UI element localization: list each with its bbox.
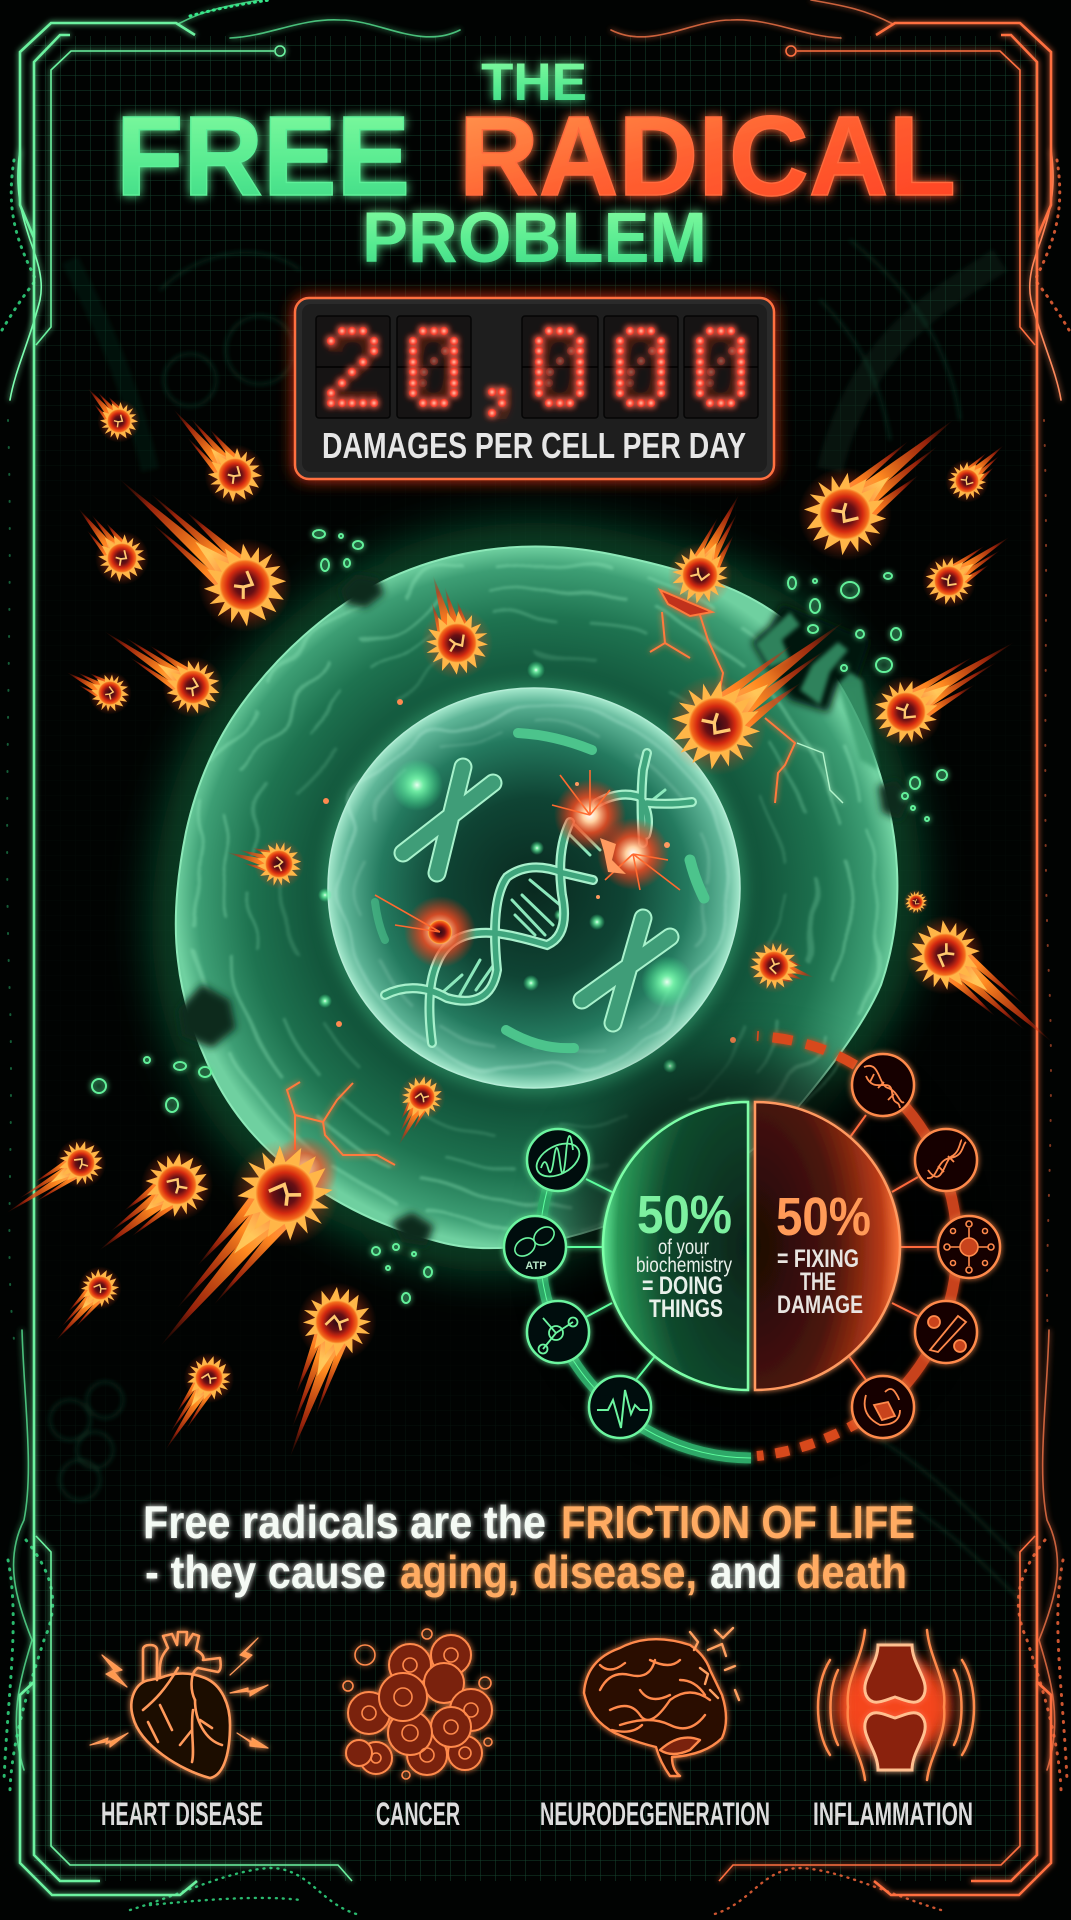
cell — [92, 530, 947, 1303]
label: cancer: CANCER — [376, 1796, 460, 1832]
tagline line 2 — [145, 1546, 907, 1598]
meteor 19 — [116, 1109, 368, 1379]
tagline line 1: Free radicals are the — [143, 1496, 546, 1548]
title line: PROBLEM: PROBLEM — [362, 199, 707, 278]
meteor 16 — [889, 899, 1071, 1074]
cell membrane — [176, 546, 897, 1248]
meteor 4 — [59, 490, 160, 596]
green half text — [636, 1185, 732, 1323]
orange node icons — [852, 1054, 1000, 1438]
icon: virus — [938, 1216, 1000, 1278]
nucleus — [318, 661, 746, 1094]
dna strikes — [375, 770, 680, 968]
nucleus texture — [342, 702, 726, 1074]
counter panel — [294, 297, 775, 480]
upper right tear — [752, 604, 870, 712]
icon: heart — [90, 1632, 268, 1778]
green half text: THINGS — [649, 1295, 723, 1323]
meteor 23 — [251, 1271, 388, 1471]
green half circle — [603, 1102, 748, 1390]
meteor 22 — [38, 1258, 130, 1354]
meteor 20 — [75, 1134, 228, 1277]
green frame — [20, 23, 352, 1895]
meteor 21 — [0, 1128, 116, 1233]
icon: atp: ATP — [525, 1260, 547, 1272]
counter digit cells — [316, 316, 758, 418]
icon: inflamed joint — [818, 1630, 974, 1780]
chromosome top left — [403, 767, 493, 873]
meteor 11 — [911, 516, 1026, 619]
meteor 8 — [656, 480, 770, 619]
green half text: of your — [658, 1236, 709, 1259]
meteor 10 — [936, 430, 1019, 512]
meteor 1 — [73, 373, 150, 452]
counter caption: DAMAGES PER CELL PER DAY — [322, 425, 746, 466]
brain cracks — [690, 1628, 739, 1700]
side sparks: green — [2, 0, 460, 1915]
meteor 15 — [899, 885, 933, 919]
connector line — [534, 480, 536, 537]
meteor 2 — [152, 388, 278, 518]
tagline line 1: FRICTION OF LIFE — [561, 1496, 915, 1548]
tagline line 2: aging, — [400, 1546, 519, 1598]
label: heart disease: HEART DISEASE — [101, 1796, 263, 1832]
orange half text: 50% — [776, 1187, 871, 1247]
icon: molecule — [527, 1301, 589, 1363]
meteor 7 — [401, 563, 502, 688]
icon: mitochondrion — [527, 1129, 589, 1191]
tagline — [143, 1496, 915, 1598]
orange half text: THE — [800, 1268, 836, 1296]
tagline line 2: - they cause — [145, 1546, 386, 1598]
chart: 50/50 biochemistry — [504, 1036, 1000, 1458]
torn membrane chunks — [756, 612, 878, 770]
title line: FREE: FREE — [116, 93, 410, 219]
meteor 3 — [90, 441, 311, 651]
title — [116, 53, 956, 278]
meteor 12 — [856, 613, 1034, 762]
meteor 13 — [645, 584, 877, 796]
green half text: 50% — [637, 1185, 732, 1245]
icon: damaged fibre — [915, 1301, 977, 1363]
tagline line 2: and — [710, 1546, 782, 1598]
label: inflammation: INFLAMMATION — [813, 1796, 973, 1832]
icon: pulse — [589, 1376, 651, 1438]
counter number: 20,000: 20,000 — [324, 310, 749, 425]
membrane texture — [190, 560, 880, 1230]
free radical meteors — [0, 373, 1071, 1471]
meteor 18 — [377, 1066, 453, 1156]
label: neurodegeneration: NEURODEGENERATION — [540, 1796, 770, 1832]
joint arcs — [818, 1630, 974, 1780]
tagline line 2: death — [796, 1546, 907, 1598]
meteor 17 — [740, 932, 822, 1005]
tagline line 2: disease, — [533, 1546, 697, 1598]
green half text: biochemistry — [636, 1254, 732, 1277]
small rods — [375, 733, 704, 1048]
heart lightning — [90, 1638, 268, 1748]
orange half text: = FIXING — [777, 1245, 859, 1273]
meteor 5 — [88, 604, 235, 729]
orange ring — [757, 1036, 957, 1456]
spokes — [566, 1115, 938, 1380]
icon: brain — [584, 1628, 739, 1776]
icon: dna strand — [915, 1129, 977, 1191]
dna helix — [385, 753, 692, 1043]
green half text: = DOING — [642, 1272, 723, 1300]
side sparks: orange — [611, 0, 1069, 1915]
title line: THE: THE — [481, 53, 587, 112]
meteor 24 — [143, 1343, 244, 1463]
title line: RADICAL: RADICAL — [459, 93, 956, 219]
background wisps — [50, 240, 1020, 1600]
cell breaches and debris — [92, 530, 947, 1303]
green ring — [540, 1160, 751, 1458]
condition labels — [101, 1796, 973, 1832]
cell cracks — [287, 590, 843, 1165]
orange half circle — [755, 1102, 900, 1390]
icon: cancer cells — [343, 1629, 492, 1779]
green glow particles — [318, 661, 736, 1073]
tagline line 1 — [143, 1496, 915, 1548]
chromosome bottom right — [582, 918, 670, 1023]
orange half text: DAMAGE — [777, 1291, 863, 1319]
green node icons — [504, 1129, 651, 1438]
orange half text — [776, 1187, 871, 1319]
icon: dna repair — [852, 1054, 914, 1116]
icon: broken cell — [852, 1376, 914, 1438]
orange frame — [719, 23, 1051, 1895]
meteor 9 — [779, 386, 985, 580]
icon: atp — [504, 1216, 566, 1278]
meteor 6 — [57, 652, 139, 722]
meteor 14 — [221, 826, 310, 895]
debris bubbles — [92, 530, 947, 1303]
